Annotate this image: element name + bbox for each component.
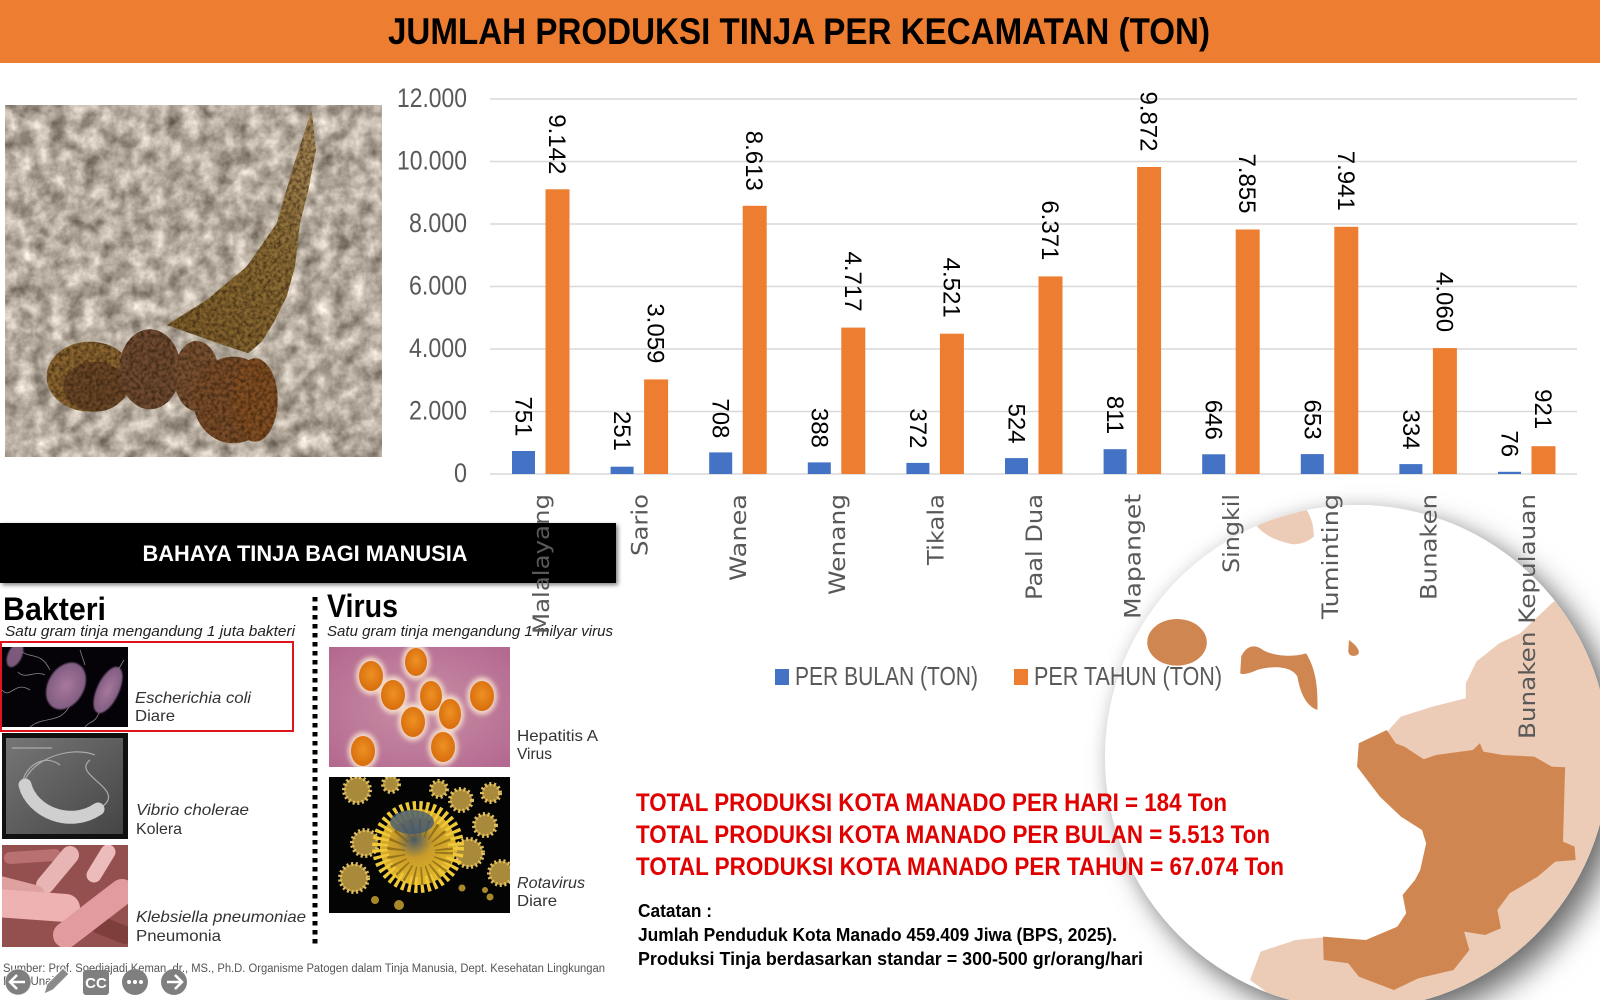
chart y axis labels: 2.000: [409, 396, 467, 426]
caption: hepatitis a: Virus: [517, 746, 552, 763]
value labels: per bulan: 811: [1101, 396, 1128, 434]
highlight box: escherichia coli: [1, 642, 293, 731]
caption: hepatitis a: Hepatitis A: [517, 728, 598, 745]
banner: bahaya tinja: [0, 523, 616, 583]
chart y axis labels: 4.000: [409, 333, 467, 363]
source note: FKM Unair: [3, 976, 58, 988]
heading: bakteri: [3, 591, 296, 640]
chart y axis labels: [397, 83, 467, 488]
value labels: per tahun: 4.060: [1430, 272, 1457, 332]
category labels: Bunaken Kepulauan: [1516, 494, 1541, 739]
caption: klebsiella pneumoniae: Pneumonia: [136, 928, 221, 945]
category labels: Wanea: [727, 494, 752, 581]
value labels: per tahun: 8.613: [740, 131, 767, 191]
value labels: per bulan: 334: [1397, 410, 1424, 450]
value labels: per tahun: [543, 91, 1556, 429]
icon: closed captions: [83, 970, 109, 995]
value labels: per tahun: 921: [1529, 389, 1556, 429]
value labels: per bulan: 524: [1002, 404, 1030, 444]
photo: escherichia coli: [2, 640, 129, 727]
value labels: per tahun: 4.521: [937, 258, 964, 318]
value labels: per bulan: 372: [904, 408, 931, 448]
chart y axis labels: 8.000: [409, 208, 467, 238]
heading: virus: Satu gram tinja mengandung 1 milyar virus: [327, 624, 613, 640]
category labels: [530, 494, 1541, 739]
category labels: Tuminting: [1319, 494, 1344, 620]
notes: Catatan :: [638, 901, 712, 921]
value labels: per bulan: 251: [608, 411, 635, 451]
value labels: per tahun: 7.855: [1233, 153, 1260, 214]
chart legend: [775, 661, 1222, 691]
photo: feces on gravel: [5, 105, 382, 457]
category labels: Paal Dua: [1023, 494, 1048, 600]
value labels: per bulan: 76: [1496, 430, 1522, 457]
value labels: per tahun: 4.717: [839, 252, 866, 312]
heading: virus: Virus: [327, 588, 398, 624]
value labels: per bulan: 653: [1298, 400, 1325, 440]
value labels: per bulan: 646: [1200, 400, 1227, 440]
totals: red text: TOTAL PRODUKSI KOTA MANADO PER HARI = 184 Ton: [636, 789, 1227, 817]
caption: escherichia coli: [135, 690, 251, 725]
icon: pen: [44, 968, 69, 994]
value labels: per tahun: 3.059: [642, 303, 669, 363]
source note: [3, 963, 605, 988]
caption: rotavirus: [517, 875, 585, 910]
icon: forward arrow: [161, 969, 187, 995]
caption: klebsiella pneumoniae: Klebsiella pneumoniae: [136, 909, 306, 926]
icon: back arrow: [5, 969, 31, 995]
banner: bahaya tinja: BAHAYA TINJA BAGI MANUSIA: [142, 541, 468, 566]
divider: dotted line: [312, 597, 318, 947]
caption: vibrio cholerae: [136, 802, 249, 838]
caption: vibrio cholerae: Kolera: [136, 821, 182, 838]
photo: vibrio cholerae: [2, 733, 128, 839]
value labels: per tahun: 7.941: [1332, 151, 1359, 211]
heading: bakteri: Bakteri: [3, 591, 106, 627]
map: manado districts: [1147, 619, 1576, 990]
chart gridlines: [490, 99, 1577, 474]
title bar: [0, 0, 1600, 63]
icon: more: [122, 969, 148, 995]
chart: tinja per kecamatan: [397, 83, 1577, 739]
map: manado in circle: [1105, 505, 1600, 1000]
notes: [638, 901, 1143, 969]
caption: escherichia coli: Escherichia coli: [135, 690, 251, 707]
caption: rotavirus: Rotavirus: [517, 875, 585, 892]
notes: Produksi Tinja berdasarkan standar = 300-500 gr/orang/hari: [638, 949, 1143, 969]
bars: per tahun: [546, 167, 1556, 474]
value labels: per bulan: 388: [805, 408, 832, 448]
category labels: Wenang: [826, 494, 851, 595]
photo: klebsiella pneumoniae: [0, 845, 128, 947]
category labels: Sario: [629, 494, 654, 556]
title bar: JUMLAH PRODUKSI TINJA PER KECAMATAN (TON): [388, 11, 1210, 52]
chart y axis labels: 12.000: [397, 83, 467, 113]
category labels: Bunaken: [1417, 494, 1442, 600]
bars: per bulan: [512, 449, 1521, 474]
value labels: per tahun: 9.872: [1135, 91, 1162, 152]
chart y axis labels: 0: [454, 458, 467, 488]
caption: escherichia coli: Diare: [135, 708, 175, 725]
map: surrounding land: [1250, 509, 1600, 1000]
photo: hepatitis a virus: [329, 644, 510, 770]
category labels: Tikala: [924, 494, 949, 566]
category labels: Mapanget: [1122, 494, 1147, 619]
heading: bakteri: Satu gram tinja mengandung 1 juta bakteri: [5, 624, 296, 640]
notes: Jumlah Penduduk Kota Manado 459.409 Jiwa (BPS, 2025).: [638, 925, 1117, 945]
value labels: per bulan: [510, 396, 1522, 457]
heading: virus: [327, 588, 613, 640]
totals: red text: [636, 789, 1284, 881]
value labels: per bulan: 708: [707, 398, 734, 438]
category labels: Singkil: [1220, 494, 1245, 573]
chart y axis labels: 10.000: [397, 146, 467, 176]
caption: hepatitis a: [517, 728, 598, 763]
photo: rotavirus: [329, 776, 513, 913]
caption: vibrio cholerae: Vibrio cholerae: [136, 802, 249, 819]
chart y axis labels: 6.000: [409, 270, 467, 300]
chart legend: PER BULAN (TON): [795, 661, 978, 691]
chart legend: PER TAHUN (TON): [1034, 661, 1222, 691]
player controls: [5, 968, 187, 995]
value labels: per bulan: 751: [510, 396, 536, 436]
category labels: Malalayang: [530, 494, 555, 634]
icon: closed captions: CC: [85, 975, 107, 992]
caption: rotavirus: Diare: [517, 893, 557, 910]
totals: red text: TOTAL PRODUKSI KOTA MANADO PER TAHUN = 67.074 Ton: [636, 853, 1284, 881]
value labels: per tahun: 9.142: [543, 114, 570, 174]
value labels: per tahun: 6.371: [1036, 200, 1063, 260]
caption: klebsiella pneumoniae: [136, 909, 306, 945]
source note: Sumber: Prof. Soedjajadi Keman, dr., MS., Ph.D. Organisme Patogen dalam Tinja Manusia, Dept. Kesehatan Lingkungan: [3, 963, 605, 975]
totals: red text: TOTAL PRODUKSI KOTA MANADO PER BULAN = 5.513 Ton: [636, 821, 1270, 849]
